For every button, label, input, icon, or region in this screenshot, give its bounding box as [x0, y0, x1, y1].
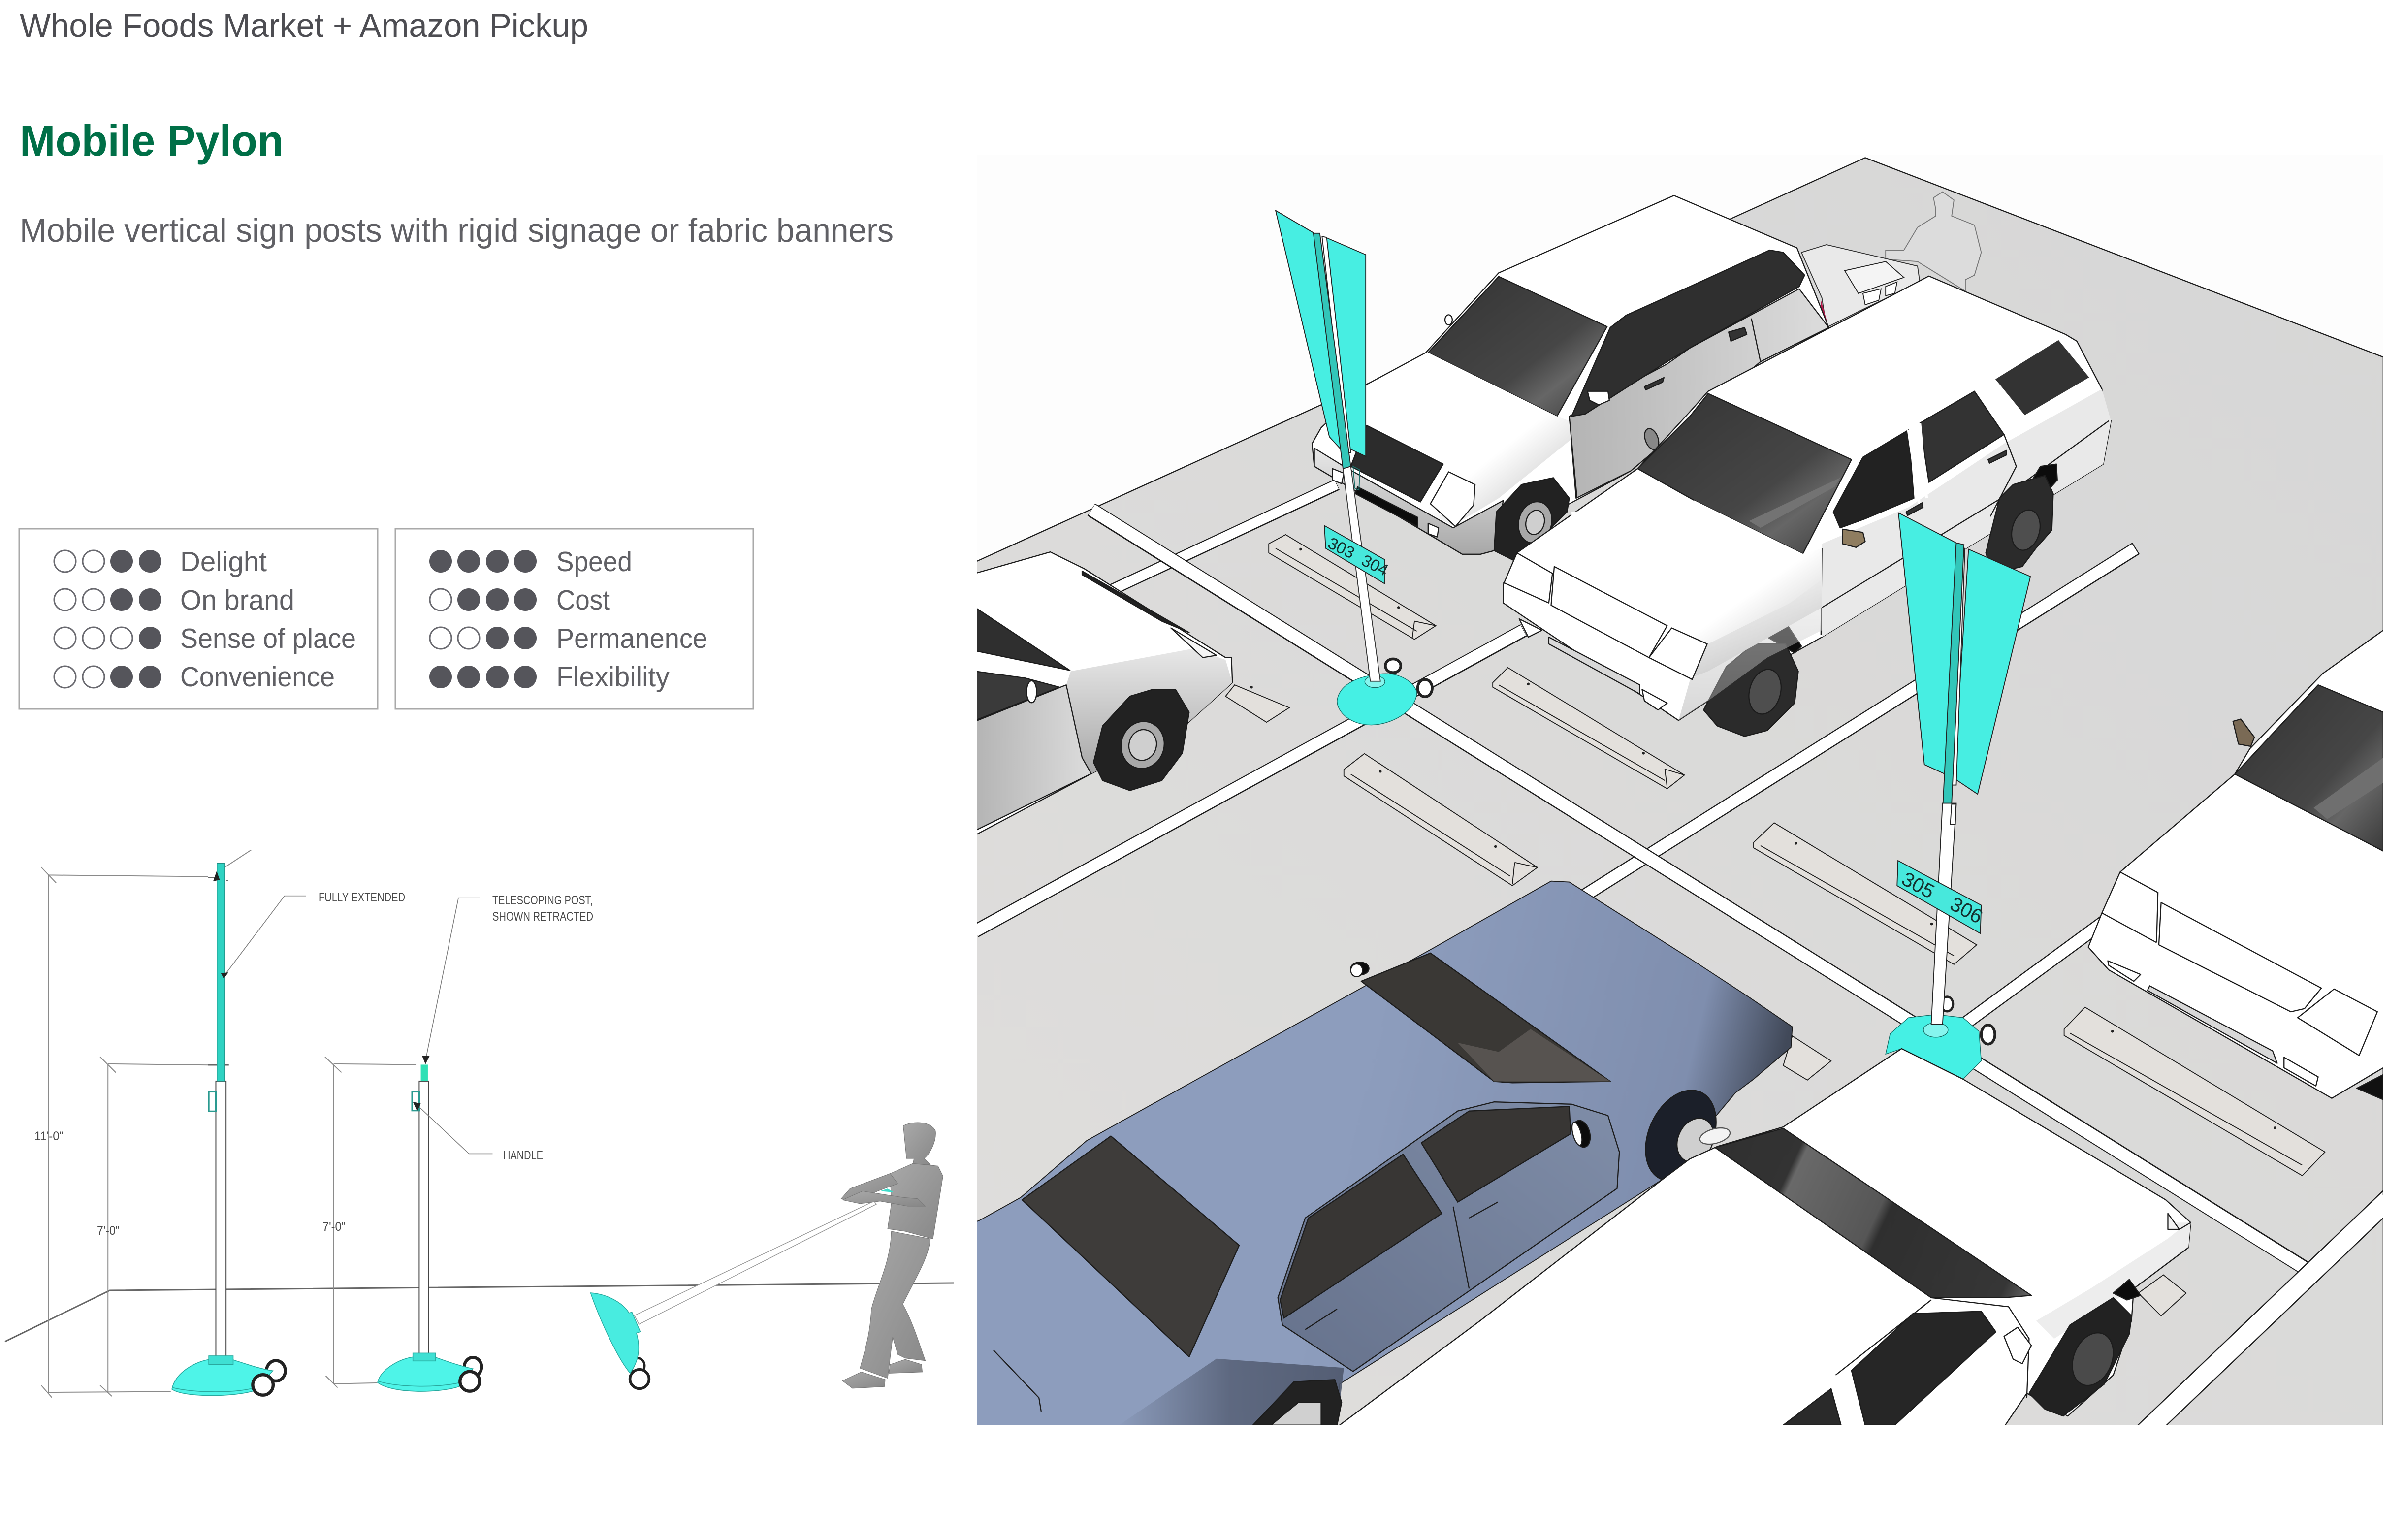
description: Mobile vertical sign posts with rigid signage or fabric banners	[20, 212, 894, 249]
dimension lines	[41, 850, 416, 1397]
white car right	[2088, 630, 2391, 1195]
rating: cost: Cost	[556, 584, 610, 616]
rating: cost	[430, 584, 610, 616]
rating: convenience	[54, 661, 335, 693]
pylon 303 304 sign	[1324, 526, 1385, 584]
retracted pole	[412, 1064, 429, 1355]
parking lot illustration	[975, 155, 2404, 1441]
ground line	[5, 1283, 954, 1342]
panel: experience ratings	[19, 529, 378, 709]
rating: delight	[54, 546, 267, 578]
leader lines	[224, 896, 492, 1154]
title: Mobile Pylon	[20, 116, 284, 165]
base: retracted pole	[378, 1353, 481, 1391]
rating: on brand: On brand	[180, 584, 294, 616]
parking stripes	[975, 484, 2404, 1441]
dimension: 7 feet extended: 7'-0"	[97, 1224, 120, 1238]
sign number 304: 304	[1359, 551, 1391, 580]
sign number 303: 303	[1325, 534, 1357, 562]
rating: delight: Delight	[180, 546, 267, 578]
car: large white SUV	[1503, 276, 2111, 737]
panel: delivery ratings	[395, 529, 753, 709]
pylon 305 306 base	[1886, 997, 1995, 1079]
car: upper white sedan	[1312, 195, 1829, 562]
shopper silhouette and cart	[1801, 192, 1981, 327]
rating: permanence	[430, 623, 707, 654]
label: handle: HANDLE	[503, 1149, 543, 1162]
rating: sense of place	[54, 623, 356, 654]
sign number 306: 306	[1947, 893, 1987, 928]
pylon 305 306 banner	[1898, 513, 2030, 803]
pylon 303 304 banner	[1276, 211, 1366, 490]
backdrop	[975, 155, 2386, 1429]
tilted pylon being wheeled	[590, 1201, 876, 1388]
rating: speed: Speed	[556, 546, 632, 578]
car: left white sedan	[975, 552, 1232, 835]
rating: convenience: Convenience	[180, 661, 335, 693]
pylon 303 304 post	[1343, 466, 1380, 681]
label: fully extended: FULLY EXTENDED	[319, 891, 405, 904]
car: lower white sedan	[1337, 1049, 2191, 1427]
rating: speed	[429, 546, 632, 578]
wheel stops	[1225, 535, 2325, 1316]
dimension: 7 feet retracted: 7'-0"	[322, 1220, 346, 1234]
dimension: 11 feet: 11'-0"	[34, 1129, 64, 1143]
pylon 305 306 post	[1931, 803, 1956, 1025]
label: shown retracted: SHOWN RETRACTED	[492, 910, 593, 924]
technical elevation drawing	[5, 850, 954, 1397]
page header: Whole Foods Market + Amazon Pickup	[20, 7, 588, 44]
rating: flexibility	[429, 661, 670, 693]
fully extended pole	[208, 863, 229, 1359]
person pushing pylon	[841, 1123, 943, 1388]
sign number 305: 305	[1898, 867, 1938, 903]
pylon 303 304 base	[1337, 659, 1432, 725]
rating: on brand	[54, 584, 294, 616]
rating: sense of place: Sense of place	[180, 623, 356, 654]
ground plane	[975, 158, 2383, 1427]
car: blue sedan	[975, 881, 1793, 1427]
base: extended pole	[172, 1356, 286, 1396]
rating: flexibility: Flexibility	[556, 661, 670, 693]
pylon 305 306 sign	[1897, 861, 1981, 933]
label: telescoping post: TELESCOPING POST,	[492, 894, 593, 907]
rating: permanence: Permanence	[556, 623, 707, 654]
